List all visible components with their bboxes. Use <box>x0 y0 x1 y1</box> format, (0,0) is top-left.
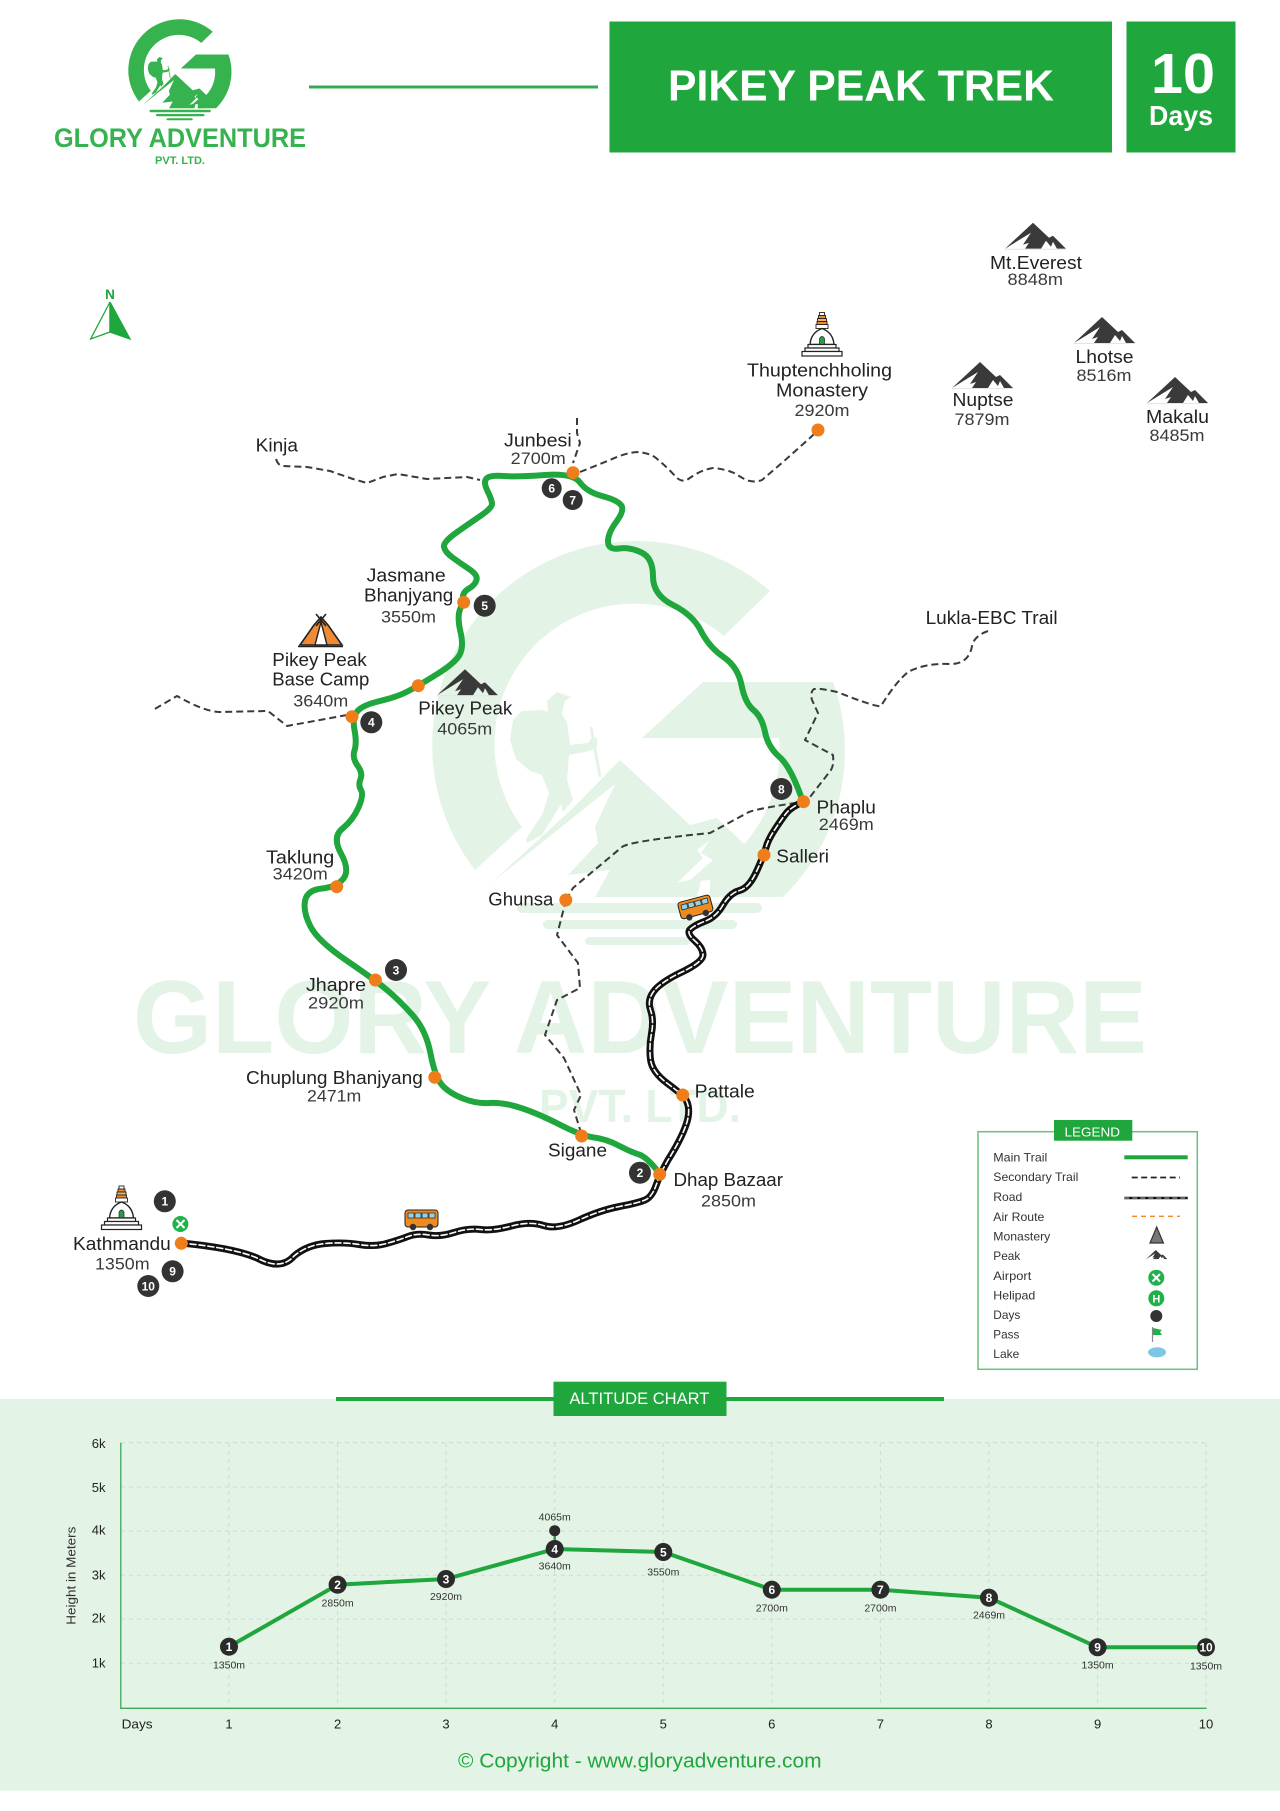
map labels: 2850m <box>701 1192 756 1211</box>
panel: legend: LEGEND <box>1064 1125 1120 1140</box>
map labels: 1350m <box>95 1254 150 1273</box>
altitude line chart: 3 <box>442 1716 450 1731</box>
day markers: 10 <box>142 1279 155 1293</box>
map labels: 3640m <box>293 692 348 711</box>
icon: airport <box>172 1216 188 1232</box>
altitude line chart: 4 <box>551 1716 558 1731</box>
icon: bus on Kathmandu road <box>405 1210 438 1230</box>
map labels: Pikey Peak <box>418 698 513 718</box>
altitude line chart: 1350m <box>213 1659 245 1671</box>
altitude line chart <box>64 1436 1222 1731</box>
altitude line chart: 4065m <box>539 1512 571 1524</box>
map labels: Makalu <box>1146 407 1209 427</box>
icon: base camp tent <box>298 614 343 646</box>
map labels: 3420m <box>273 864 328 883</box>
altitude line chart: 6k <box>92 1436 106 1451</box>
watermark logo: PVT. LTD. <box>539 1080 741 1132</box>
panel: legend: Main Trail <box>993 1150 1047 1164</box>
altitude line chart: 8 <box>985 1716 993 1731</box>
altitude line chart: 8 <box>986 1591 993 1605</box>
altitude line chart: 1 <box>226 1640 233 1654</box>
map labels: Mt.Everest <box>990 253 1082 273</box>
map labels: 4065m <box>437 719 492 738</box>
icon: Kathmandu stupa <box>102 1186 142 1230</box>
altitude line chart: 1350m <box>1082 1660 1114 1672</box>
map labels: Kathmandu <box>73 1234 171 1254</box>
icon: Nuptse peak <box>952 362 1013 388</box>
altitude line chart: 2850m <box>322 1598 354 1610</box>
altitude line chart: 9 <box>1094 1716 1101 1731</box>
day markers: 9 <box>169 1265 176 1279</box>
altitude line chart: 4 <box>551 1542 558 1556</box>
panel: legend: Airport <box>993 1269 1032 1283</box>
map labels: 2920m <box>308 994 364 1012</box>
watermark logo <box>133 541 1147 1132</box>
map labels: Dhap Bazaar <box>674 1170 783 1190</box>
company logo <box>54 19 306 167</box>
day markers: 8 <box>778 782 785 796</box>
altitude line chart: 2700m <box>756 1602 788 1614</box>
day markers: 7 <box>569 493 576 507</box>
map labels: 7879m <box>954 410 1010 429</box>
map labels: Lhotse <box>1076 347 1134 367</box>
map labels: Salleri <box>776 846 829 866</box>
map labels: 2920m <box>794 401 850 420</box>
days badge: 10 <box>1151 42 1215 106</box>
panel: legend: Helipad <box>993 1288 1035 1302</box>
altitude line chart: 2 <box>334 1716 341 1731</box>
place dots <box>175 424 825 1250</box>
map labels: Kinja <box>256 436 299 456</box>
icon: bus on Salleri road <box>677 894 714 922</box>
map labels: 3550m <box>381 608 436 627</box>
map labels: Nuptse <box>952 390 1014 410</box>
north arrow <box>91 287 130 339</box>
day markers <box>137 478 792 1297</box>
icon: Lhotse peak <box>1074 317 1135 344</box>
altitude line chart: 1k <box>92 1656 106 1671</box>
altitude line chart: 1 <box>225 1716 233 1731</box>
altitude line chart: 5 <box>660 1716 667 1731</box>
altitude line chart: 2469m <box>973 1610 1005 1622</box>
map labels: 8516m <box>1076 366 1132 385</box>
main trail <box>305 475 803 1174</box>
altitude line chart: 4k <box>92 1523 106 1538</box>
day markers: 3 <box>393 963 400 977</box>
altitude line chart: 7 <box>877 1583 884 1597</box>
icon: Thuptenchholing monastery <box>802 312 842 356</box>
altitude line chart: 5k <box>92 1480 106 1495</box>
altitude line chart: 2 <box>334 1578 341 1592</box>
panel: altitude chart background <box>0 1399 1280 1791</box>
altitude line chart: 10 <box>1199 1716 1213 1731</box>
altitude line chart: 10 <box>1199 1641 1213 1655</box>
map labels: Pikey Peak <box>272 650 368 670</box>
altitude line chart: Height in Meters <box>64 1527 78 1625</box>
altitude line chart: 2920m <box>430 1591 462 1603</box>
altitude line chart: 6 <box>768 1716 775 1731</box>
altitude line chart: Days <box>122 1716 153 1731</box>
altitude line chart: 3 <box>443 1572 450 1586</box>
altitude line chart: 2700m <box>864 1603 897 1615</box>
panel: legend: Days <box>993 1308 1020 1322</box>
map labels: Pattale <box>695 1081 755 1101</box>
panel: legend: Monastery <box>993 1230 1050 1244</box>
panel: legend: Secondary Trail <box>993 1170 1078 1184</box>
map labels: Base Camp <box>272 670 369 690</box>
company logo: PVT. LTD. <box>155 155 205 167</box>
map labels: 2471m <box>307 1087 361 1106</box>
panel: legend: Pass <box>993 1328 1019 1342</box>
map labels: Taklung <box>266 847 334 867</box>
panel: legend <box>978 1120 1197 1369</box>
map labels: Jhapre <box>306 975 366 995</box>
icon: Makalu peak <box>1147 377 1208 404</box>
map labels: Thuptenchholing <box>747 361 892 381</box>
icon: Pikey peak <box>437 669 498 696</box>
map labels: Sigane <box>548 1141 607 1161</box>
panel: legend: Air Route <box>993 1210 1045 1224</box>
title banner <box>610 22 1112 152</box>
panel: legend: H <box>1152 1294 1160 1306</box>
day markers: 1 <box>161 1194 168 1208</box>
altitude chart heading <box>336 1382 944 1416</box>
copyright: © Copyright - www.gloryadventure.com <box>458 1750 822 1772</box>
map labels: Lukla-EBC Trail <box>926 608 1058 628</box>
days badge: Days <box>1149 100 1213 131</box>
day markers: 5 <box>481 599 488 613</box>
map labels: Phaplu <box>816 797 876 817</box>
header line <box>309 86 598 88</box>
altitude line chart: 5 <box>660 1545 667 1559</box>
altitude line chart: 3550m <box>647 1566 680 1578</box>
altitude line chart: 7 <box>877 1716 884 1731</box>
map labels: 2700m <box>511 449 566 468</box>
altitude line chart: 2k <box>92 1611 106 1626</box>
secondary trails <box>153 418 988 1136</box>
map labels: Monastery <box>776 381 868 401</box>
altitude line chart: 9 <box>1094 1641 1101 1655</box>
company logo: GLORY ADVENTURE <box>54 123 306 153</box>
watermark logo: GLORY ADVENTURE <box>133 960 1147 1076</box>
day markers: 4 <box>368 716 375 730</box>
map labels <box>73 253 1209 1273</box>
title banner: PIKEY PEAK TREK <box>668 62 1054 111</box>
panel: legend: Lake <box>993 1347 1020 1361</box>
map labels: Ghunsa <box>488 890 554 910</box>
map labels: Junbesi <box>504 431 572 451</box>
road <box>181 802 803 1264</box>
panel: legend: Peak <box>993 1249 1021 1263</box>
altitude line chart: 6 <box>768 1583 775 1597</box>
map labels: Jasmane <box>367 566 446 586</box>
map labels: 2469m <box>819 815 874 834</box>
altitude line chart: 3k <box>92 1567 106 1582</box>
days badge <box>1126 22 1236 152</box>
altitude line chart: 3640m <box>539 1561 571 1573</box>
altitude line chart: 1350m <box>1190 1660 1222 1672</box>
north arrow: N <box>105 287 115 302</box>
panel: legend: Road <box>993 1190 1022 1204</box>
day markers: 2 <box>637 1166 644 1180</box>
icon: Everest peak <box>1005 223 1066 249</box>
map labels: Chuplung Bhanjyang <box>246 1068 423 1088</box>
map labels: 8848m <box>1008 270 1063 289</box>
altitude chart heading: ALTITUDE CHART <box>569 1390 709 1408</box>
day markers: 6 <box>548 482 555 496</box>
map labels: Bhanjyang <box>364 586 453 606</box>
map labels: 8485m <box>1150 426 1204 445</box>
